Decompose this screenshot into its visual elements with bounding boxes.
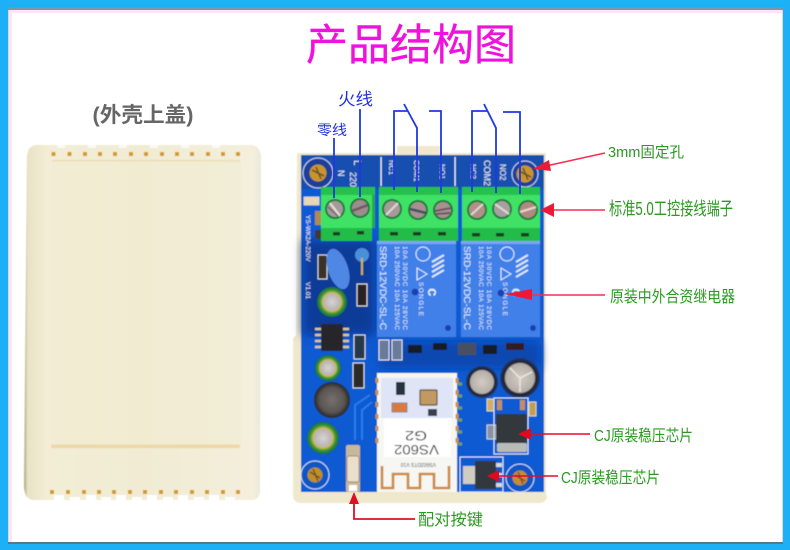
label: pairing button: 配对按键 (418, 511, 483, 529)
SOP8 chip (315, 324, 349, 351)
antenna trace (382, 466, 449, 488)
mounting screws (301, 158, 538, 492)
terminal silk labels: N (336, 170, 346, 176)
pairing button (346, 445, 360, 492)
terminal silk labels: COM1 (412, 160, 421, 182)
terminal silk labels: L (351, 160, 362, 166)
terminal silk labels: NO2 (498, 164, 507, 181)
relay 1 switch symbol (394, 104, 441, 193)
relay 1: c (424, 288, 441, 296)
terminal block: relay 2 (462, 187, 540, 241)
wifi module: VS602DTS V10 (400, 461, 436, 467)
shell groove line (51, 444, 240, 448)
label: terminal: 标准5.0工控接线端子 (609, 199, 733, 219)
live wire line (359, 109, 361, 197)
capacitors (307, 287, 540, 454)
terminal block: power (321, 187, 375, 241)
relay 1: SONGLE (417, 282, 424, 317)
module label: VS602 (394, 442, 439, 458)
subtitle: outer shell cover: (外壳上盖) (92, 104, 194, 127)
relay 2: c (508, 288, 525, 296)
shell bottom notches (50, 490, 240, 494)
title: 产品结构图 (306, 22, 516, 70)
arrow: relay (505, 289, 605, 300)
relay 2: SRD-12VDC-SL-C (461, 246, 472, 330)
relay 2: 10A 30VDC 10A 28VDC (485, 246, 492, 330)
shell top notches (52, 152, 240, 156)
arrow: mounting hole (533, 153, 605, 171)
label: live wire: 火线 (338, 90, 373, 109)
terminal silk labels: NC1 (387, 160, 396, 175)
terminal block: relay 1 (379, 187, 458, 241)
label: mounting hole: 3mm固定孔 (608, 144, 684, 161)
module label: G2 (405, 428, 427, 444)
blue PCB (301, 155, 544, 492)
wiring callouts: blue lines (334, 104, 520, 198)
varistor and blue capacitor (318, 246, 369, 306)
relay 2: SONGLE (501, 282, 508, 317)
arrow: pairing button (349, 492, 415, 519)
board enclosure base (293, 146, 547, 503)
relay 2: 10A 250VAC 10A 125VAC (477, 246, 484, 330)
label: upper regulator: CJ原装稳压芯片 (594, 427, 693, 445)
relay 1: SRD-12VDC-SL-C (377, 246, 388, 330)
terminal silk labels: NC2 (469, 164, 478, 179)
terminal silk labels: V1.01 (304, 282, 311, 299)
relay 1: 10A 30VDC 10A 28VDC (401, 246, 408, 330)
terminal silk labels: NO1 (438, 164, 447, 179)
lower regulator chip (460, 457, 503, 492)
neutral wire line (333, 138, 335, 198)
label: lower regulator: CJ原装稳压芯片 (561, 469, 660, 487)
circuit board (293, 146, 547, 503)
relay 2 switch symbol (472, 104, 520, 194)
small SMD parts (353, 335, 536, 439)
shell: top cover (24, 145, 261, 500)
relay 1: 10A 250VAC 10A 125VAC (393, 246, 400, 330)
upper regulator chip (494, 398, 528, 454)
terminal silk labels: COM2 (482, 160, 492, 186)
arrow: terminal (540, 203, 605, 217)
wifi module (377, 373, 462, 492)
arrow: lower regulator (487, 470, 558, 482)
terminal silk labels (304, 157, 507, 299)
relay 2 (461, 241, 540, 337)
terminal silk labels: 220V (348, 172, 358, 193)
small LED and resistor (304, 197, 321, 239)
label: neutral wire: 零线 (317, 122, 347, 138)
label: relay: 原装中外合资继电器 (610, 288, 735, 306)
module label (384, 418, 451, 458)
arrow: upper regulator (518, 428, 590, 440)
terminal silk labels: YS-WK2A-220V (304, 215, 311, 262)
relay 1 (377, 241, 456, 337)
